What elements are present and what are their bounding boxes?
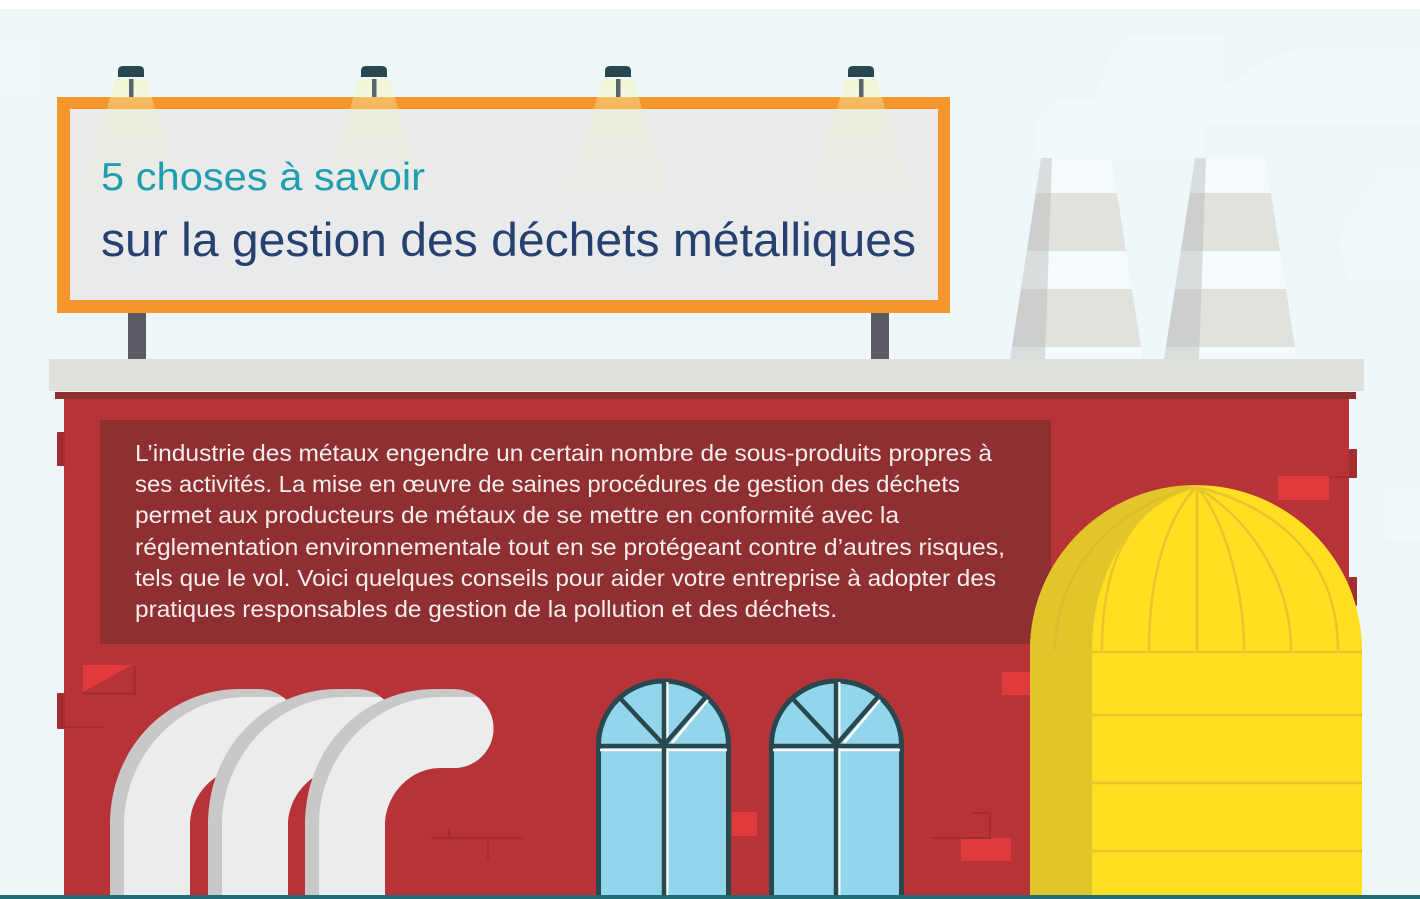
- title line 2: sur la gestion des déchets métalliques: [101, 213, 916, 266]
- intro text: L’industrie des métaux engendre un certain nombre de sous-produits propres à: [135, 440, 992, 466]
- brick highlights: [732, 476, 1329, 861]
- ground line: [0, 895, 1420, 899]
- window 1: [598, 680, 729, 899]
- smoke clouds: [1035, 35, 1420, 158]
- lamp 1: [69, 66, 193, 215]
- pipes: [110, 689, 494, 895]
- intro text: pratiques responsables de gestion de la pollution et des déchets.: [135, 596, 837, 622]
- brick top-left: [83, 665, 136, 695]
- title: [101, 156, 916, 266]
- lamp 3: [556, 66, 680, 215]
- pipe 3: [305, 689, 494, 895]
- lamp 4: [799, 66, 923, 215]
- chimney left: [1010, 158, 1143, 359]
- intro text: réglementation environnementale tout en se protégeant contre d’autres risques,: [135, 534, 1005, 560]
- mortar lines: [431, 812, 991, 860]
- window 2: [771, 680, 902, 899]
- title line 1: 5 choses à savoir: [101, 156, 425, 199]
- intro text: [135, 440, 1005, 622]
- billboard: [57, 97, 950, 313]
- roof ledge: [49, 359, 1364, 399]
- intro text: ses activités. La mise en œuvre de saines procédures de gestion des déchets: [135, 471, 960, 497]
- pipe 1: [110, 689, 298, 895]
- silo seams: [1030, 487, 1362, 851]
- brick wall: [57, 399, 1357, 895]
- chimney right: [1164, 158, 1297, 359]
- silo shadow: [1030, 485, 1196, 895]
- pipe 2: [208, 689, 397, 895]
- intro panel: [100, 420, 1051, 644]
- lamp 2: [312, 66, 436, 215]
- intro text: tels que le vol. Voici quelques conseils pour aider votre entreprise à adopter des: [135, 565, 996, 591]
- billboard posts: [128, 313, 889, 359]
- silo: [1030, 485, 1362, 895]
- intro text: permet aux producteurs de métaux de se mettre en conformité avec la: [135, 502, 899, 528]
